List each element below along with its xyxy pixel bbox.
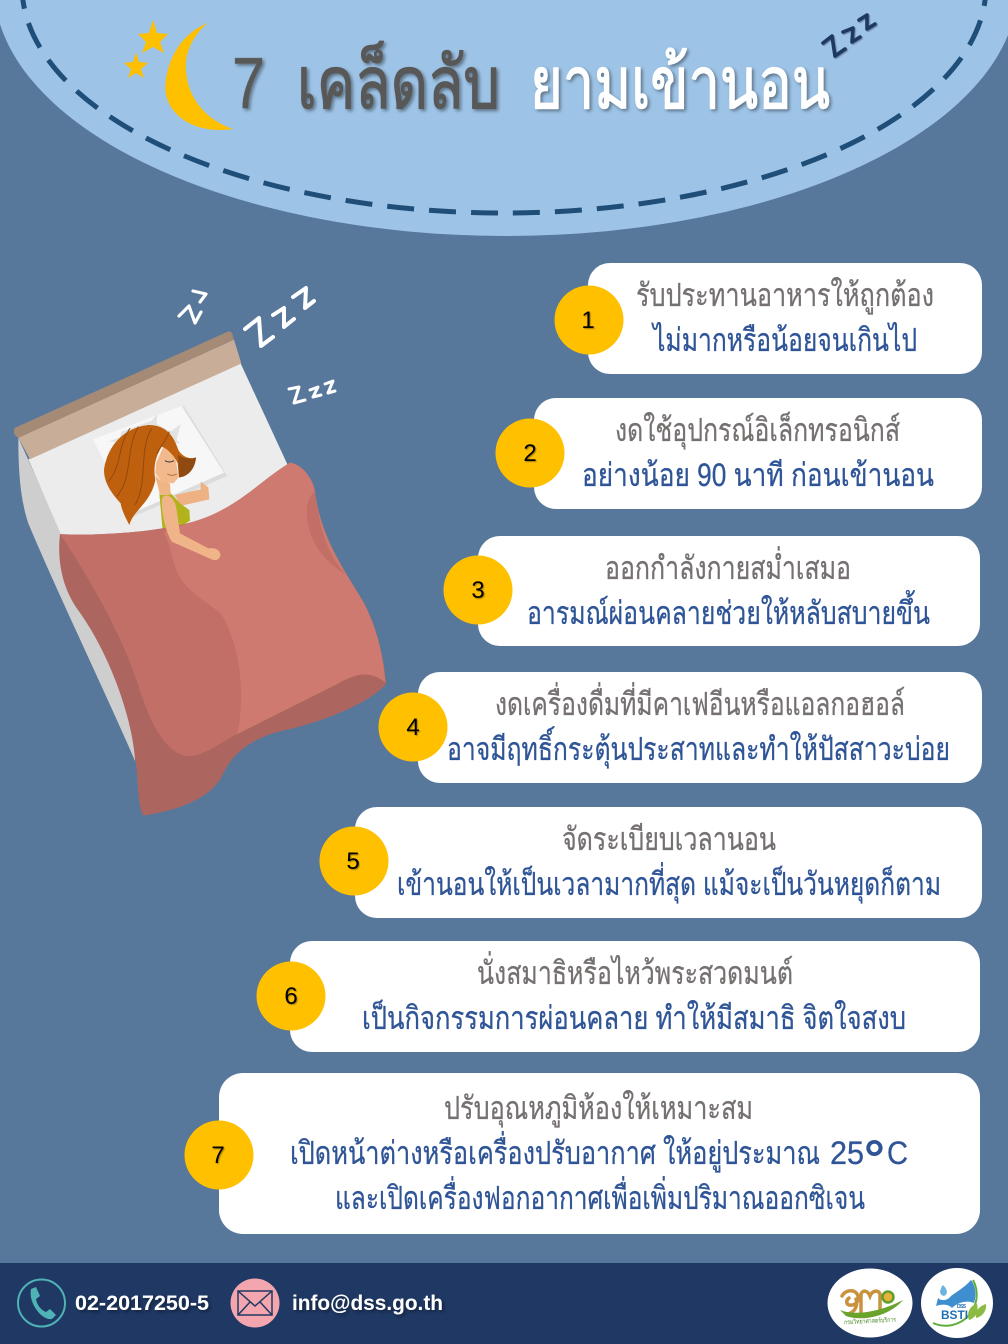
card 5 <box>320 807 982 918</box>
title: 7 <box>232 44 265 124</box>
card 2: 2 <box>523 440 537 467</box>
footer bar <box>0 1263 1008 1344</box>
logo: BSTI: DSS <box>957 1304 967 1310</box>
card 7 <box>184 1073 980 1234</box>
card 6: 6 <box>284 983 298 1010</box>
illustration: sleeping woman in bed <box>14 288 386 815</box>
card 6: นั่งสมาธิหรือไหว้พระสวดมนต์ <box>477 951 793 991</box>
card 3 <box>444 536 980 646</box>
icon: mail <box>230 1278 280 1328</box>
card 2: งดใช้อุปกรณ์อิเล็กทรอนิกส์ <box>615 411 900 450</box>
snoring zzz <box>179 288 335 403</box>
card 7: C <box>887 1135 908 1171</box>
card 5: 5 <box>346 848 360 875</box>
blanket <box>59 463 386 815</box>
logo: BSTI: BSTI <box>941 1308 968 1322</box>
title: ยามเข้านอน <box>530 44 830 124</box>
card 1: ไม่มากหรือน้อยจนเกินไป <box>651 322 917 358</box>
card 4: 4 <box>406 714 420 741</box>
logo: BSTI <box>921 1268 993 1338</box>
icon: moon and stars <box>124 20 233 130</box>
phone number: 02-2017250-5 <box>75 1292 209 1315</box>
card 4 <box>378 672 982 783</box>
icon: phone <box>18 1280 65 1326</box>
title <box>232 41 830 124</box>
card 6 <box>256 941 980 1052</box>
header arc <box>0 0 1008 236</box>
card 7: และเปิดเครื่องฟอกอากาศเพื่อเพิ่มปริมาณออกซิเจน <box>335 1176 865 1216</box>
card 2: อย่างน้อย 90 นาที ก่อนเข้านอน <box>582 457 934 493</box>
card 1: 1 <box>581 307 595 334</box>
card 7: เปิดหน้าต่างหรือเครื่องปรับอากาศ ให้อยู่ประมาณ <box>290 1131 820 1173</box>
pillow and woman <box>93 406 227 531</box>
email: info@dss.go.th <box>292 1292 443 1315</box>
logo: anniversary: กรมวิทยาศาสตร์บริการ <box>844 1316 897 1326</box>
logo: anniversary <box>828 1268 912 1338</box>
bed <box>14 331 288 761</box>
title: เคล็ดลับ <box>297 41 500 124</box>
card 1 <box>554 263 982 374</box>
arm over blanket <box>162 496 220 560</box>
card 3: ออกกำลังกายสม่ำเสมอ <box>605 546 851 586</box>
card 3: 3 <box>471 577 485 604</box>
card 2 <box>496 398 982 509</box>
card 1: รับประทานอาหารให้ถูกต้อง <box>636 277 934 315</box>
icon: header zzz <box>823 15 875 56</box>
card 5: จัดระเบียบเวลานอน <box>562 821 776 857</box>
card 7: ปรับอุณหภูมิห้องให้เหมาะสม <box>444 1090 753 1128</box>
card 7: 25 <box>830 1135 864 1171</box>
card 7: ° <box>864 1130 885 1188</box>
card 7: 7 <box>211 1142 225 1169</box>
